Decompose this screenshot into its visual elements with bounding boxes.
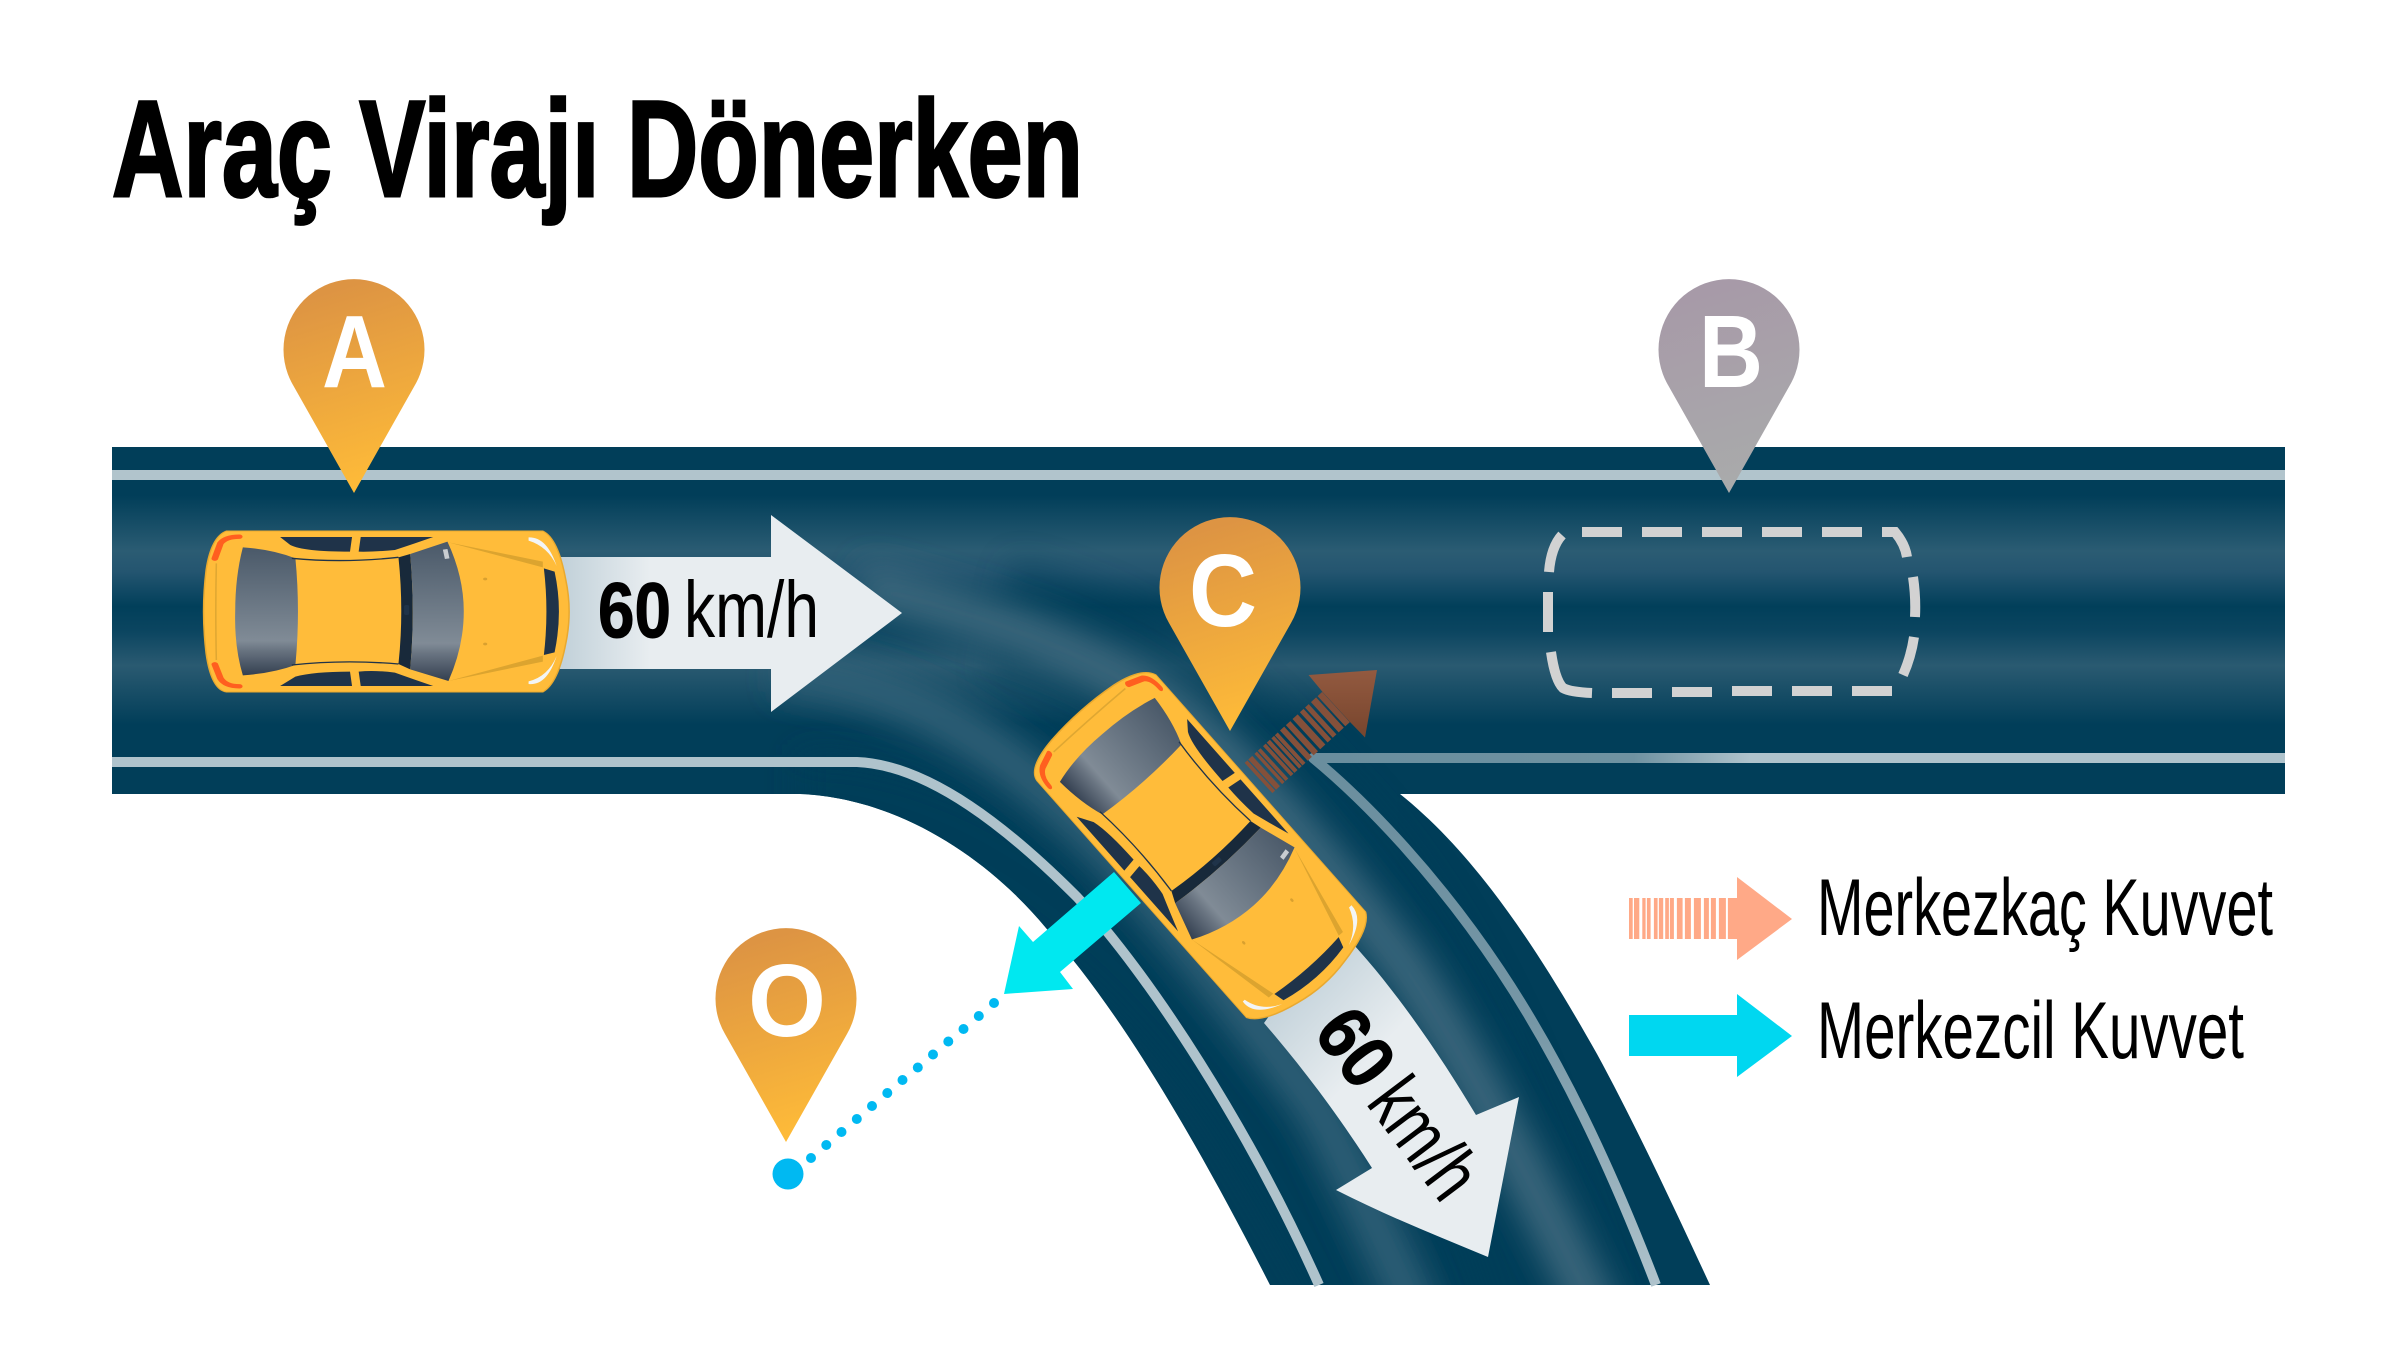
centrifugal force arrow [1258,670,1377,778]
road edge lines [112,475,2285,1285]
pin B: B [1699,294,1763,409]
centripetal force arrow [1004,872,1141,994]
dotted radius line to center point [772,998,999,1190]
pin B [1658,279,1800,493]
title: Araç Virajı Dönerken [112,73,1083,226]
car at C [1021,658,1383,1037]
car at A [204,531,569,692]
speed arrow curved [1264,925,1519,1257]
legend: centripetal [1629,986,2244,1077]
speed arrow straight [560,515,902,712]
pin C: C [1189,533,1257,648]
infographic [112,95,2285,1287]
pin O: O [748,943,826,1058]
pin C [1160,517,1300,731]
dashed ghost car at B [1548,532,1915,693]
speed arrow curved: km/h [1351,1060,1499,1216]
pin A [284,279,424,493]
road with curve [112,447,2285,1320]
legend: centrifugal [1629,863,2273,960]
speed arrow straight: km/h [684,565,819,654]
pin A: A [322,294,387,409]
speed arrow straight: 60 [598,566,671,654]
speed arrow curved: 60 [1298,992,1412,1104]
pin O [716,928,856,1142]
